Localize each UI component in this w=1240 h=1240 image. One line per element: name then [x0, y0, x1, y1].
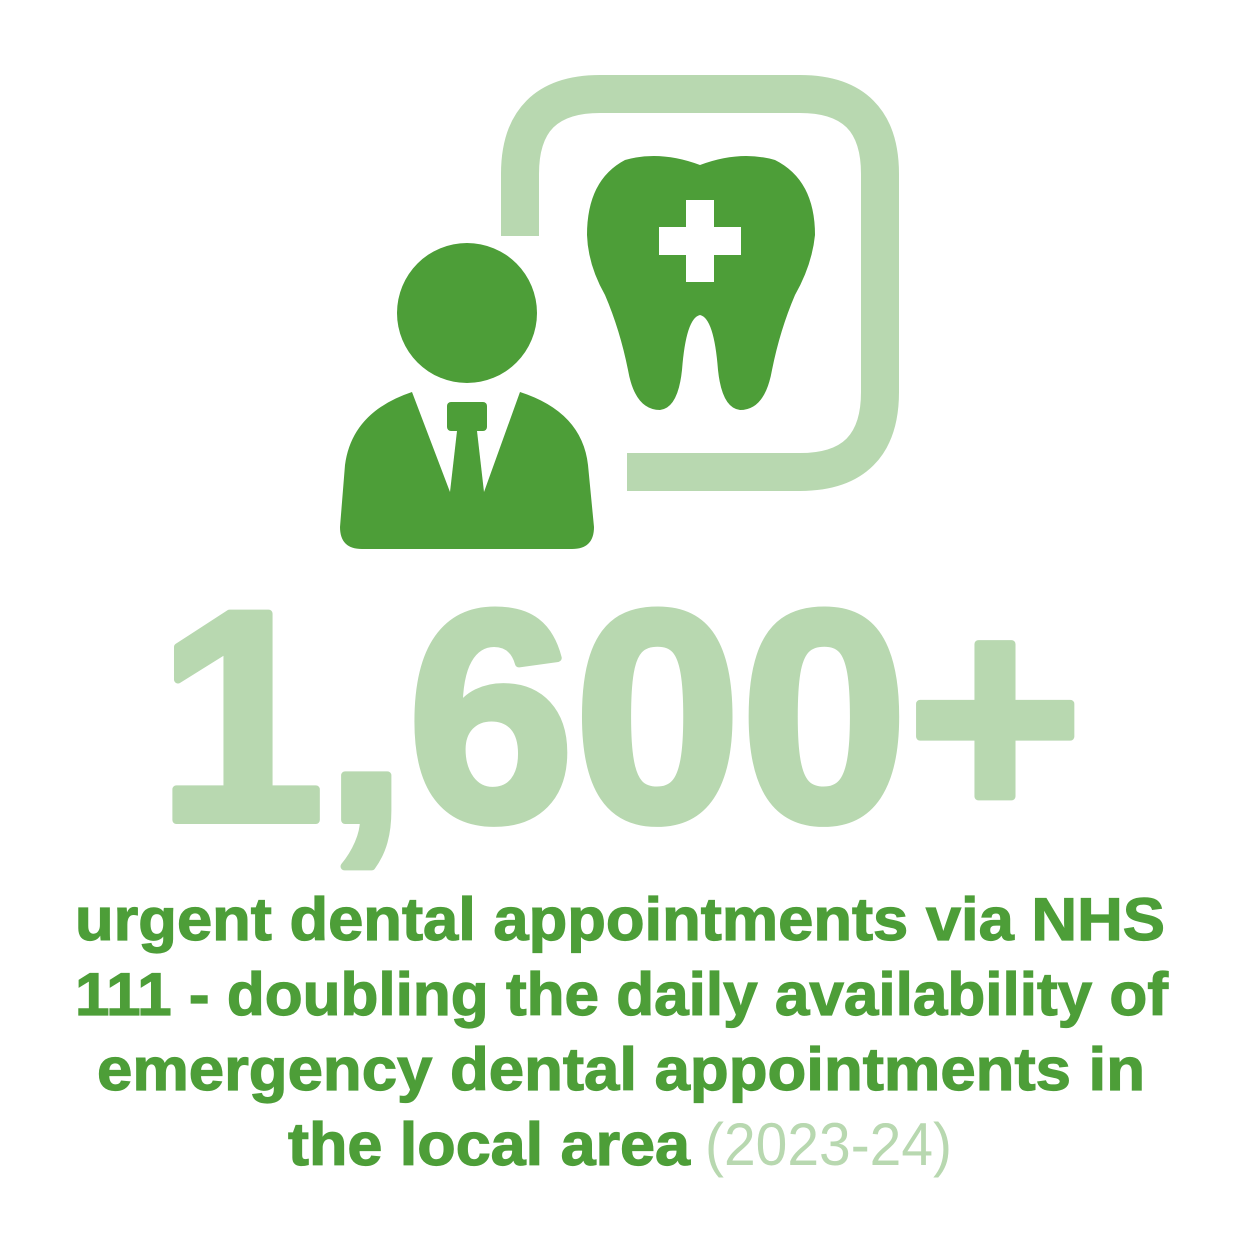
description text: emergency dental appointments in: [97, 1036, 1145, 1103]
description text: urgent dental appointments via NHS: [75, 886, 1165, 953]
description text: 111 - doubling the daily availability of: [75, 961, 1169, 1028]
icon: tooth with cross: [587, 156, 815, 410]
description text: [75, 886, 1169, 1178]
icon: person: [340, 243, 594, 549]
big number: 1,600+: [158, 548, 1082, 884]
description text: the local area: [288, 1111, 691, 1178]
description text: (2023-24): [705, 1111, 952, 1178]
icon: speech frame: [520, 94, 880, 472]
